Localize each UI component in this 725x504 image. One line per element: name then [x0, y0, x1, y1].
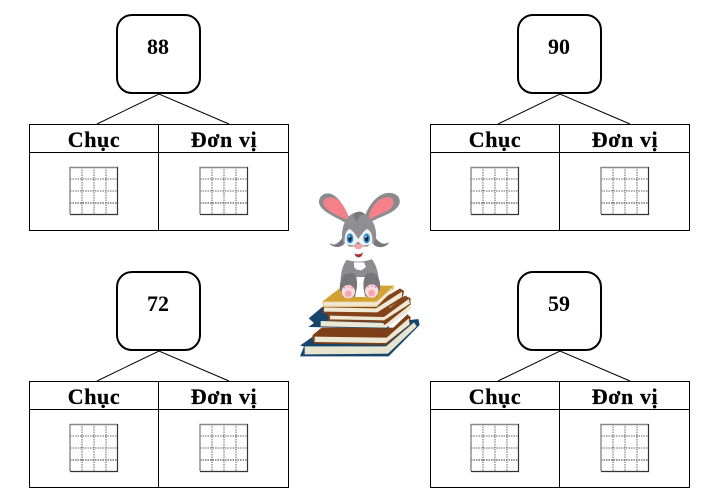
panel: number 88 — [30, 15, 288, 230]
number box 88 — [117, 15, 200, 93]
number box 59: 59 — [548, 291, 570, 316]
rabbit head — [329, 212, 389, 262]
writing grid: tens — [471, 167, 519, 215]
writing grid: units — [601, 424, 649, 472]
writing grid: tens — [471, 424, 519, 472]
place value table: Đơn vị — [592, 127, 658, 152]
rabbit nose and mouth — [354, 244, 363, 257]
writing grid: units — [200, 424, 248, 472]
panel: number 90 — [430, 15, 690, 230]
writing grid: units — [601, 167, 649, 215]
place value table: Chục — [68, 127, 120, 152]
place value table — [30, 382, 288, 488]
rabbit eyes — [347, 233, 370, 243]
connector lines — [97, 94, 229, 124]
number box 90 — [518, 15, 601, 93]
icon: rabbit — [319, 193, 400, 298]
place value table — [30, 124, 288, 230]
rabbit body — [341, 259, 379, 297]
number box 72 — [117, 272, 200, 350]
number box 88: 88 — [147, 34, 169, 59]
place value table: Đơn vị — [191, 384, 257, 409]
upper brown book — [327, 296, 411, 322]
navy book — [308, 307, 390, 328]
connector lines — [498, 94, 630, 124]
number box 90: 90 — [548, 34, 570, 59]
place value table: Chục — [469, 384, 521, 409]
place value table — [430, 124, 690, 230]
number box 59 — [518, 272, 601, 350]
place value table: Chục — [469, 127, 521, 152]
top golden book — [322, 285, 394, 302]
connector lines — [97, 351, 229, 381]
thin brown book — [322, 288, 404, 315]
bottom blue book — [300, 319, 420, 356]
place value table: Đơn vị — [191, 127, 257, 152]
icon: stack of books — [300, 285, 420, 356]
writing grid: units — [200, 167, 248, 215]
rabbit ears — [319, 193, 400, 224]
writing grid: tens — [70, 424, 118, 472]
place value table — [430, 382, 690, 488]
number box 72: 72 — [147, 291, 169, 316]
place value table: Chục — [68, 384, 120, 409]
illustration: rabbit on books — [300, 193, 420, 356]
panel: number 72 — [30, 272, 288, 488]
rabbit legs and feet — [340, 273, 380, 298]
place value table: Đơn vị — [592, 384, 658, 409]
writing grid: tens — [70, 167, 118, 215]
connector lines — [498, 351, 630, 381]
panel: number 59 — [430, 272, 690, 488]
brown book — [312, 314, 411, 345]
